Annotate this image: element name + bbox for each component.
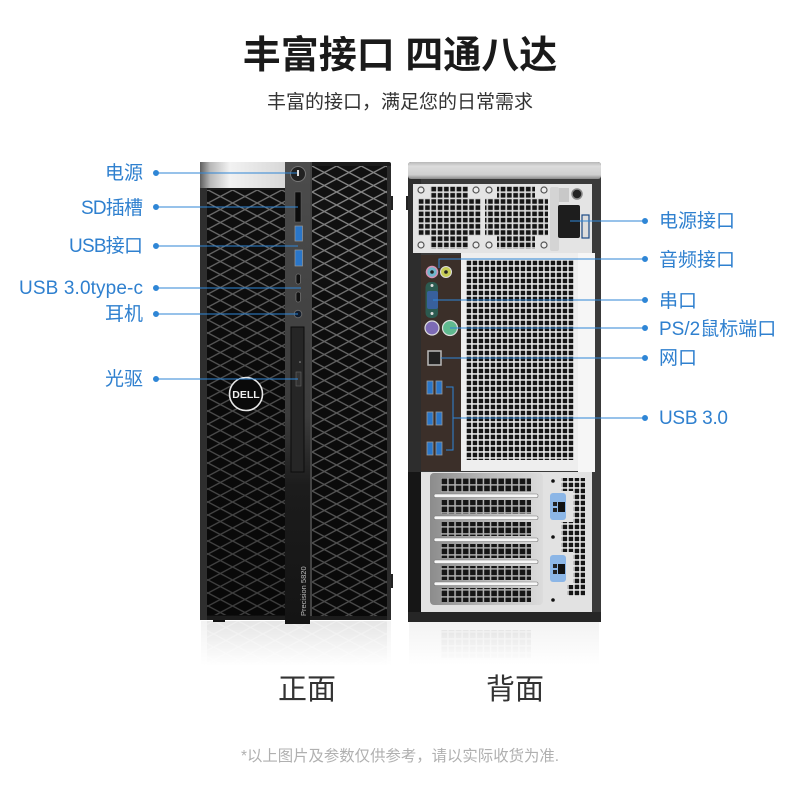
serial port bbox=[426, 282, 438, 318]
Dell logo: DELL bbox=[232, 389, 260, 401]
front labels: 耳机 bbox=[105, 303, 143, 325]
back labels: 音频接口 bbox=[659, 249, 735, 271]
panel: front tower bbox=[200, 162, 393, 666]
subtitle: 丰富的接口，满足您的日常需求 bbox=[267, 91, 533, 113]
network port bbox=[428, 351, 441, 365]
Dell logo bbox=[230, 378, 262, 410]
left grille bbox=[207, 190, 286, 615]
back labels: 电源接口 bbox=[659, 210, 735, 232]
callouts: back bbox=[433, 218, 648, 450]
back labels: PS/2鼠标端口 bbox=[659, 318, 776, 340]
caption: back: 背面 bbox=[486, 673, 544, 706]
right side vents bbox=[561, 478, 585, 596]
model label: Precision 5820 bbox=[299, 566, 308, 616]
PSU socket bbox=[558, 205, 580, 238]
front labels: SD插槽 bbox=[81, 197, 143, 219]
audio jacks bbox=[426, 266, 438, 278]
line: power bbox=[156, 172, 297, 174]
right grille bbox=[312, 166, 387, 616]
silver top handle bbox=[200, 162, 285, 188]
callouts: front bbox=[154, 170, 301, 382]
PSU handle bbox=[550, 187, 559, 251]
back labels bbox=[659, 210, 776, 429]
SD slot bbox=[295, 192, 301, 222]
line: SD bbox=[156, 206, 298, 208]
front labels: 电源 bbox=[105, 162, 143, 184]
bottom bar bbox=[408, 612, 601, 622]
front labels bbox=[19, 162, 143, 390]
panel: back tower bbox=[406, 162, 601, 665]
PCI slots bbox=[430, 473, 543, 605]
front labels: USB 3.0type-c bbox=[19, 278, 143, 299]
back labels: 网口 bbox=[659, 348, 697, 369]
centre control column bbox=[285, 162, 310, 624]
side knob bbox=[406, 196, 408, 210]
line: USB bbox=[156, 245, 298, 247]
PSU fan vents bbox=[418, 186, 481, 249]
reflection of front tower bbox=[200, 621, 392, 666]
back labels: USB 3.0 bbox=[659, 408, 728, 429]
title: 丰富接口 四通八达 bbox=[243, 35, 557, 77]
caption: front: 正面 bbox=[278, 674, 336, 706]
PSU plate bbox=[413, 184, 592, 253]
front labels: USB接口 bbox=[69, 235, 143, 257]
reflection of back tower bbox=[408, 622, 600, 665]
USB 3.0 ports bbox=[427, 381, 442, 455]
power button bbox=[290, 166, 306, 182]
headphone jack bbox=[294, 310, 302, 318]
line: optical bbox=[156, 378, 298, 380]
USB ports bbox=[295, 226, 302, 241]
side knobs bbox=[391, 196, 393, 210]
right side strip bbox=[578, 253, 595, 472]
PCI bay plate bbox=[421, 472, 592, 612]
PSU screws bbox=[418, 187, 547, 248]
top silver cap bbox=[408, 162, 601, 179]
line: headphones bbox=[156, 313, 298, 315]
feet bbox=[213, 620, 225, 622]
PS/2 ports bbox=[425, 321, 439, 335]
type-c ports bbox=[296, 274, 300, 284]
footnote: *以上图片及参数仅供参考，请以实际收货为准. bbox=[241, 747, 559, 765]
mesh vent panel bbox=[461, 253, 579, 471]
front labels: 光驱 bbox=[105, 368, 143, 390]
back labels: 串口 bbox=[659, 290, 697, 312]
line: type-c bbox=[156, 287, 301, 289]
optical drive bbox=[291, 327, 304, 472]
grille shading bbox=[207, 190, 387, 616]
blue clips bbox=[550, 493, 566, 582]
bay screws bbox=[551, 479, 555, 483]
IO panel bbox=[421, 255, 462, 471]
